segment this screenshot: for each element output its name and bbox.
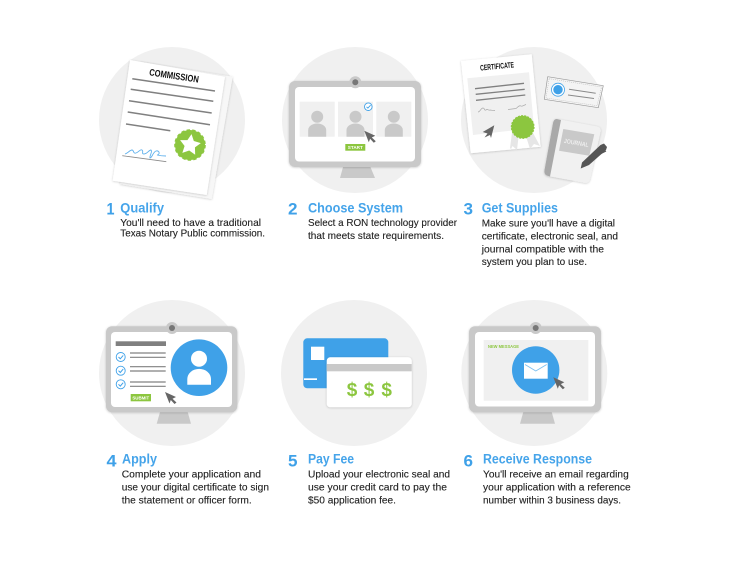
panel: step 6 receive response bbox=[461, 300, 631, 506]
step 1 body text: Texas Notary Public commission. bbox=[120, 228, 265, 240]
icon: blue profile avatar bbox=[171, 339, 227, 396]
icon: monitor with new message bbox=[469, 322, 601, 424]
step 4 body text bbox=[122, 470, 269, 506]
panel: step 2 choose system bbox=[282, 47, 458, 242]
start button: START bbox=[348, 145, 363, 150]
icon: envelope in blue circle bbox=[512, 346, 559, 394]
icon: cursor bbox=[364, 131, 376, 143]
step 5 body text: Upload your electronic seal and bbox=[308, 470, 450, 480]
step 3 body text: certificate, electronic seal, and bbox=[482, 231, 618, 242]
icon: monitor with application form bbox=[106, 322, 237, 424]
icon: commission document: COMMISSION bbox=[148, 67, 200, 86]
step 5 body text bbox=[308, 470, 450, 506]
icon background circle 2 bbox=[282, 47, 428, 193]
step 3 body text bbox=[481, 218, 618, 268]
icon: credit card back with dollar signs: $ bbox=[364, 380, 375, 401]
step 3 body text: Make sure you'll have a digital bbox=[482, 218, 615, 229]
icon: blue check badge bbox=[364, 103, 372, 110]
icon: electronic seal card bbox=[544, 77, 603, 108]
icon: cursor bbox=[553, 377, 565, 389]
step 4 body text: the statement or officer form. bbox=[122, 495, 252, 506]
icon: certificate bbox=[461, 54, 541, 153]
step 6 body text: number within 3 business days. bbox=[483, 495, 621, 506]
icon background circle 1 bbox=[99, 47, 245, 193]
icon background circle 3 bbox=[461, 47, 607, 193]
icon: monitor with new message: NEW MESSAGE bbox=[488, 344, 519, 349]
step 6 body text: You'll receive an email regarding bbox=[483, 470, 629, 481]
icon background circle 5 bbox=[281, 300, 427, 446]
step 6 heading: Receive Response bbox=[483, 452, 592, 467]
icon: signature bbox=[122, 150, 166, 162]
step 3 number: 3 bbox=[464, 200, 473, 218]
step 1 body text bbox=[120, 218, 265, 240]
icon: cursor bbox=[165, 392, 176, 404]
icon: certificate: CERTIFICATE bbox=[480, 60, 515, 73]
step 2 body text bbox=[308, 218, 458, 242]
icon: credit card back with dollar signs bbox=[327, 357, 412, 407]
icon: credit card back with dollar signs: $ bbox=[381, 380, 392, 401]
step 1 number: 1 bbox=[106, 200, 114, 218]
step 6 body text: your application with a reference bbox=[483, 483, 631, 494]
step 2 body text: Select a RON technology provider bbox=[308, 218, 458, 229]
step 4 body text: use your digital certificate to sign bbox=[122, 482, 269, 494]
panel: step 4 apply bbox=[99, 300, 269, 506]
panel: step 3 get supplies bbox=[461, 47, 618, 268]
step 2 number: 2 bbox=[288, 200, 298, 218]
icon: green star seal bbox=[175, 130, 205, 160]
icon background circle 4 bbox=[99, 300, 245, 446]
icon: credit card back with dollar signs: $ bbox=[347, 380, 358, 401]
step 5 number: 5 bbox=[288, 452, 298, 470]
step 6 number: 6 bbox=[464, 452, 473, 470]
step 5 body text: use your credit card to pay the bbox=[308, 482, 447, 494]
step 5 heading: Pay Fee bbox=[308, 452, 354, 467]
icon: ribbon seal bbox=[510, 116, 540, 150]
step 3 body text: journal compatible with the bbox=[481, 244, 604, 255]
step 2 heading: Choose System bbox=[308, 201, 403, 216]
step 2 body text: that meets state requirements. bbox=[308, 231, 444, 242]
icon: journal and pen bbox=[544, 119, 607, 183]
step 4 heading: Apply bbox=[122, 452, 157, 467]
panel: step 5 pay fee bbox=[281, 300, 450, 506]
panel: step 1 qualify bbox=[99, 47, 265, 240]
icon: journal and pen: JOURNAL bbox=[563, 138, 589, 149]
icon: commission document bbox=[113, 60, 233, 199]
step 4 body text: Complete your application and bbox=[122, 470, 261, 480]
icon: monitor with three video panels bbox=[289, 76, 421, 178]
icon background circle 6 bbox=[461, 300, 607, 446]
icon: credit card front bbox=[303, 338, 388, 388]
step 3 heading: Get Supplies bbox=[482, 201, 558, 216]
step 6 body text bbox=[483, 470, 631, 506]
submit button: SUBMIT bbox=[132, 395, 150, 400]
icon: cursor bbox=[483, 125, 494, 138]
step 4 number: 4 bbox=[106, 452, 117, 470]
checklist bbox=[116, 352, 166, 389]
step 5 body text: $50 application fee. bbox=[308, 495, 396, 506]
step 1 heading: Qualify bbox=[120, 201, 164, 216]
step 3 body text: system you plan to use. bbox=[482, 257, 587, 268]
step 1 body text: You'll need to have a traditional bbox=[120, 218, 261, 229]
